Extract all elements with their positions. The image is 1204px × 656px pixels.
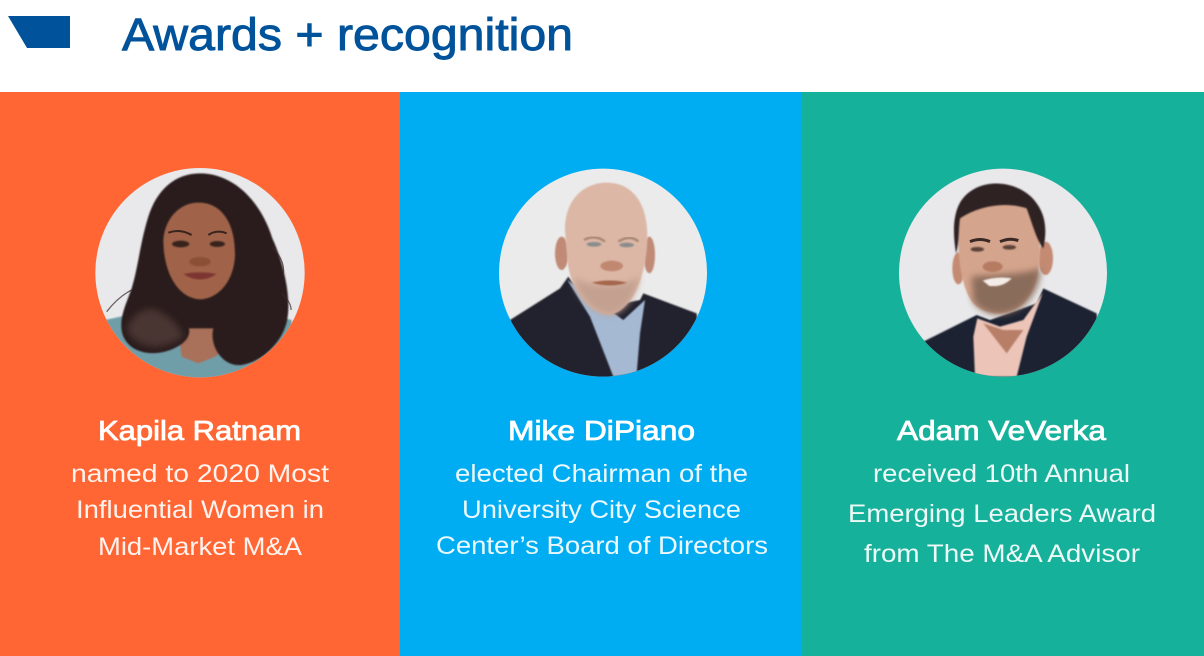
description: Mike DiPiano: [436, 460, 768, 560]
description: Adam VeVerka: from The M&A Advisor: [864, 540, 1140, 568]
description: Adam VeVerka: received 10th Annual: [873, 460, 1130, 488]
name: Mike DiPiano: Mike DiPiano: [508, 415, 695, 446]
description: Kapila Ratnam: Influential Women in: [76, 496, 324, 524]
portrait: Adam VeVerka: [899, 168, 1107, 377]
description: Adam VeVerka: [848, 460, 1156, 568]
name: Kapila Ratnam: Kapila Ratnam: [98, 415, 301, 446]
description: Kapila Ratnam: Mid-Market M&A: [98, 533, 302, 561]
description: Kapila Ratnam: named to 2020 Most: [71, 460, 329, 488]
description: Kapila Ratnam: [71, 460, 329, 561]
description: Mike DiPiano: University City Science: [462, 496, 741, 524]
header marker shape: [8, 16, 70, 48]
description: Adam VeVerka: Emerging Leaders Award: [848, 500, 1156, 528]
panel: Adam VeVerka: [802, 92, 1204, 656]
description: Mike DiPiano: elected Chairman of the: [455, 460, 748, 488]
name: Adam VeVerka: Adam VeVerka: [897, 415, 1106, 446]
panel: Kapila Ratnam: [0, 92, 400, 656]
description: Mike DiPiano: Center’s Board of Directors: [436, 532, 768, 560]
panel: Mike DiPiano: [400, 92, 802, 656]
title: Awards + recognition: [122, 9, 573, 60]
portrait: Kapila Ratnam: [95, 168, 305, 378]
portrait: Mike DiPiano: [499, 168, 707, 377]
